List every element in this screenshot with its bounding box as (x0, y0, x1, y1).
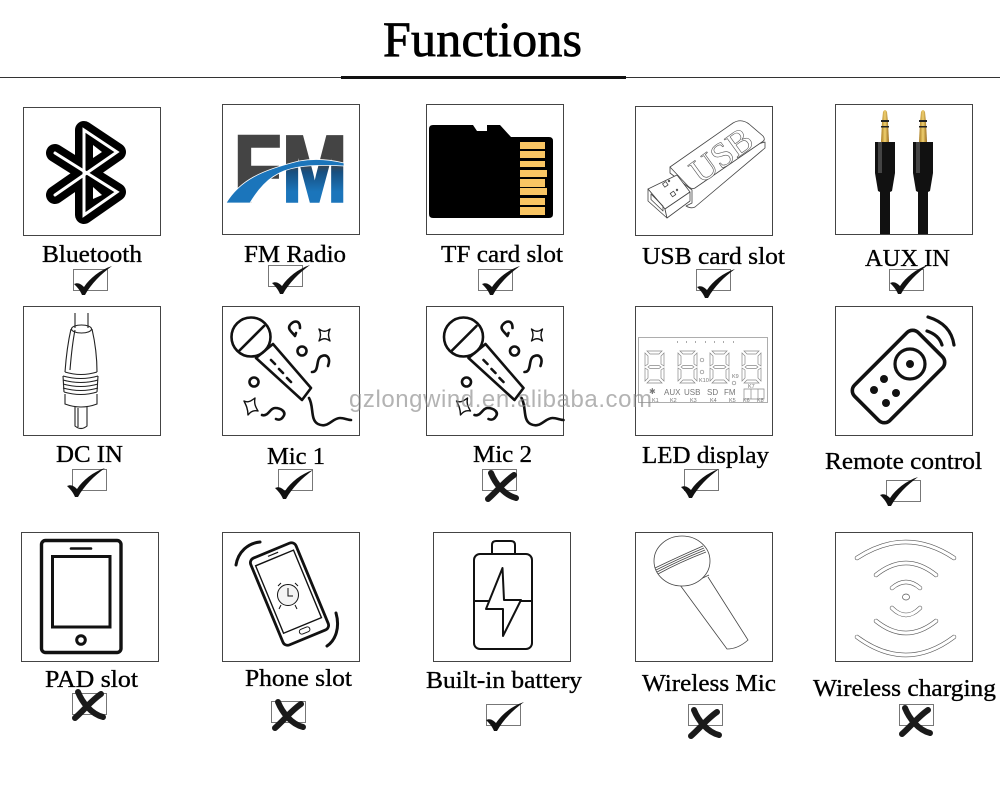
check mark (486, 702, 524, 731)
icon box (222, 306, 360, 436)
cell: Wireless Mic (636, 532, 776, 736)
check mark (74, 266, 112, 295)
icon: LED panel: K3 (690, 398, 697, 404)
icon box (426, 306, 564, 436)
label: PAD slot (45, 667, 138, 693)
cell: FM Radio (222, 104, 360, 294)
checkbox (890, 270, 924, 290)
icon: LED panel: AUX (664, 388, 681, 397)
icon: LED panel: K5 (729, 398, 736, 404)
check mark (275, 470, 313, 499)
check mark (272, 265, 310, 294)
icon: tablet (42, 540, 121, 652)
cell: PAD slot (22, 532, 158, 718)
icon: micro SD card (429, 125, 553, 218)
icon: remote (849, 317, 954, 426)
icon: USB stick: USB (682, 120, 760, 191)
icon box (222, 532, 360, 662)
icon box (636, 306, 772, 436)
checkbox (478, 270, 512, 290)
icon: wireless waves (857, 542, 954, 655)
cell: Mic 1 (222, 306, 360, 499)
checkbox (482, 470, 516, 490)
icon: USB stick (648, 120, 765, 218)
icon: karaoke microphone (232, 318, 351, 425)
icon: LED panel: FM (724, 388, 736, 397)
icon: karaoke microphone (444, 318, 564, 425)
cell: Mic 2 (426, 306, 564, 499)
check mark (697, 269, 735, 298)
checkbox (72, 470, 106, 490)
icon: LED panel: K1 (652, 398, 659, 404)
cell: Phone slot (222, 532, 360, 728)
check mark (681, 469, 719, 498)
cell: Wireless charging (813, 532, 996, 734)
label: DC IN (56, 442, 123, 468)
checkbox (74, 270, 108, 290)
icon: LED panel (638, 338, 768, 404)
icon box (434, 532, 570, 662)
cell: Bluetooth (24, 108, 160, 295)
watermark: gzlongwind.en.alibaba.com (349, 386, 652, 413)
cell: Remote control (825, 306, 982, 506)
title rule (0, 76, 1000, 79)
label: Bluetooth (42, 242, 142, 268)
check mark (67, 468, 105, 497)
title: Functions (383, 11, 582, 67)
icon: LED panel: SD (707, 388, 718, 397)
icon: LED panel: K6 (743, 398, 750, 404)
cell: TF card slot (426, 104, 564, 295)
cross mark (275, 702, 303, 728)
cell: LED display (636, 306, 772, 498)
icon: audio jacks (875, 110, 933, 234)
checkbox (688, 704, 722, 726)
checkbox (268, 266, 302, 286)
icon box (636, 532, 772, 662)
icon box (836, 306, 972, 436)
label: Phone slot (245, 666, 352, 692)
cross mark (691, 710, 719, 736)
cross mark (75, 692, 103, 718)
label: Wireless Mic (642, 671, 776, 697)
cell: DC IN (24, 306, 160, 497)
icon: LED panel: K10 (699, 378, 709, 384)
cross mark (902, 708, 930, 734)
label: Mic 2 (473, 442, 532, 468)
check mark (890, 265, 928, 294)
checkbox (900, 704, 934, 726)
icon box (24, 108, 160, 236)
icon: microphone outline (654, 536, 748, 649)
cell: Built-in battery (426, 532, 582, 731)
checkbox (72, 694, 106, 714)
icon box (636, 106, 772, 236)
icon: phone with alarm clock (236, 541, 338, 647)
icon box (836, 532, 972, 662)
cross mark (488, 473, 516, 499)
icon: bluetooth (55, 130, 117, 215)
icon: LED panel: USB (684, 388, 700, 397)
icon: DC plug (63, 313, 98, 428)
checkbox (272, 702, 306, 722)
icon: LED panel: K4 (710, 398, 717, 404)
icon: LED panel: K9 (732, 374, 739, 380)
cell: AUX IN (836, 104, 972, 294)
checkbox (696, 270, 730, 290)
cell: USB card slot (636, 106, 785, 298)
icon box (222, 104, 360, 234)
label: LED display (642, 443, 769, 469)
icon: battery (474, 541, 532, 649)
icon: LED panel: ✱ (649, 387, 656, 396)
checkbox (486, 704, 520, 726)
icon: LED panel: K8 (757, 398, 764, 404)
check mark (482, 266, 520, 295)
icon box (22, 532, 158, 662)
icon: FM logo: FM (234, 117, 348, 222)
label: Wireless charging (813, 676, 996, 702)
icon box (426, 104, 564, 234)
icon: LED panel: K7 (748, 384, 755, 390)
icon: LED panel: K2 (670, 398, 677, 404)
label: FM Radio (244, 242, 346, 268)
label: USB card slot (642, 244, 785, 270)
label: TF card slot (441, 242, 563, 268)
check mark (880, 477, 918, 506)
label: Mic 1 (267, 444, 325, 470)
label: AUX IN (865, 246, 950, 272)
checkbox (886, 480, 920, 502)
label: Built-in battery (426, 668, 582, 694)
checkbox (278, 470, 312, 490)
icon box (836, 104, 972, 234)
label: Remote control (825, 449, 982, 475)
checkbox (684, 470, 718, 490)
icon box (24, 306, 160, 436)
